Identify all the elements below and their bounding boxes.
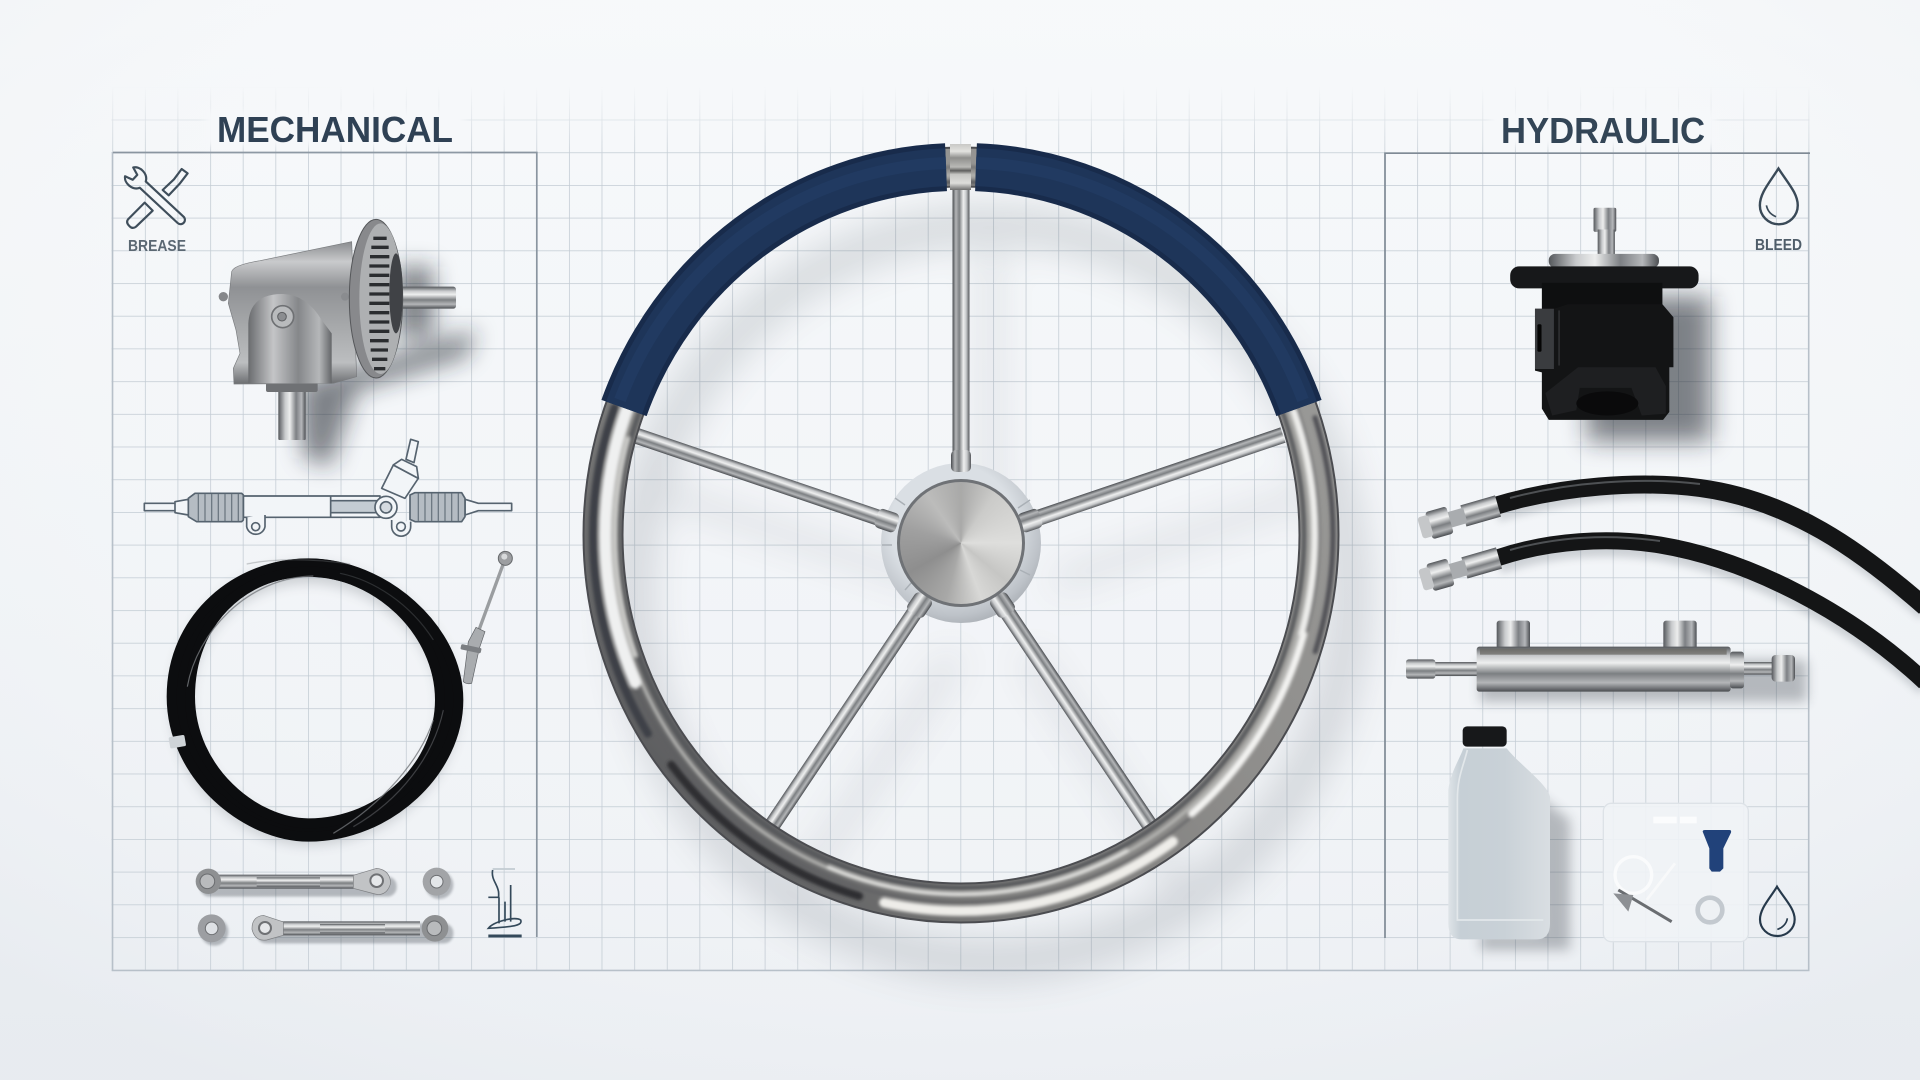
hose lower (1497, 541, 1920, 682)
rack mounting ears (247, 515, 411, 536)
bleed needle (1613, 863, 1675, 922)
pump details (1535, 309, 1666, 415)
hub base (881, 463, 1041, 623)
cable clip (168, 735, 186, 749)
gearbox right shaft (400, 287, 456, 309)
bottle body (1448, 748, 1550, 939)
hydraulic cylinder (1406, 621, 1807, 702)
wheel shadow (633, 225, 1349, 961)
fitting lower (1417, 545, 1503, 594)
bag seal ring (1698, 898, 1722, 922)
cylinder barrel (1477, 647, 1731, 692)
icon: wrench and screwdriver (122, 165, 191, 230)
gearbox (219, 219, 477, 467)
pump flange (1510, 266, 1699, 288)
bottle cap (1463, 726, 1507, 747)
icon label: bleed: BLEED (1755, 237, 1802, 254)
cylinder right fitting (1730, 652, 1795, 688)
top collar (950, 144, 971, 190)
icon: grease gun outline (488, 869, 522, 936)
blue connector (1703, 830, 1731, 872)
gearbox shadow (300, 267, 477, 467)
pump main body (1535, 304, 1673, 420)
upper tie rod (196, 868, 391, 894)
washer lower (198, 914, 226, 942)
bag sheet (1603, 803, 1748, 942)
hose highlights (1510, 481, 1700, 550)
spoke collars (873, 450, 1044, 620)
pump steel plate (1549, 254, 1659, 268)
navy grip right (976, 163, 1303, 408)
fitting upper (1416, 493, 1502, 542)
icon: blood drop bleed (1760, 169, 1798, 224)
cable end fitting (460, 551, 512, 684)
rack boots (188, 493, 465, 522)
tie rods and washers (196, 868, 453, 946)
cable highlights (187, 560, 443, 833)
cylinder shadow (1480, 660, 1807, 702)
hose upper (1495, 485, 1920, 607)
icon label: brease: BREASE (128, 238, 186, 255)
pump shaft (1594, 208, 1616, 255)
cylinder ports (1497, 621, 1697, 651)
pump shadow (1587, 297, 1711, 441)
lower tie rod (252, 915, 448, 942)
gearbox flange (349, 219, 403, 378)
bag ring (1615, 857, 1652, 893)
hydraulic hoses (1416, 481, 1920, 688)
hose shadows (1497, 491, 1920, 688)
steel rim (589, 153, 1333, 917)
gearbox lower shaft (266, 383, 318, 440)
gearbox housing (228, 242, 357, 384)
bottle shadow (1480, 787, 1570, 950)
hydraulic pump (1510, 208, 1711, 441)
tie rod shadow (200, 871, 453, 946)
cable loops (172, 563, 458, 837)
bag label slots (1653, 817, 1697, 823)
title: hydraulic: HYDRAULIC (1501, 110, 1705, 151)
fluid bottle (1448, 726, 1570, 950)
steering wheel (589, 144, 1349, 961)
navy grip left (620, 163, 946, 408)
icon: fluid drop (1760, 887, 1795, 936)
steering rack line drawing (144, 439, 512, 536)
rack end rods (144, 499, 512, 515)
cylinder left rod (1406, 659, 1480, 679)
hub cap (896, 478, 1026, 608)
wheel spokes (631, 188, 1286, 831)
washer upper (423, 868, 451, 896)
background grid (112, 87, 1810, 971)
panel: hydraulic frame (1385, 153, 1810, 938)
panel: mechanical frame (113, 152, 537, 937)
pump upper body (1542, 283, 1662, 310)
bleed kit bag (1603, 803, 1748, 942)
rack tube (243, 496, 380, 517)
title halos (205, 110, 1716, 146)
rack pinion housing (375, 439, 418, 518)
title: mechanical: MECHANICAL (217, 109, 453, 150)
cable shadow (181, 573, 449, 835)
control cable coil (168, 551, 512, 837)
gearbox boss (248, 294, 332, 383)
